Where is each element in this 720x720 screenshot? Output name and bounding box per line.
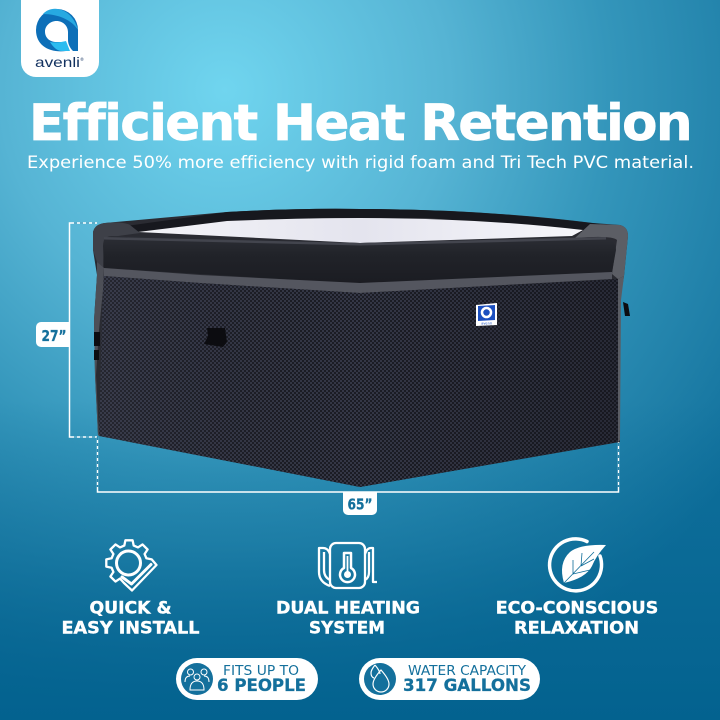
icon: water drops: [364, 663, 396, 695]
label: QUICK &: [90, 598, 172, 618]
feature: dual heating system: SYSTEM: [309, 618, 385, 638]
pill: water capacity 317 gallons: 317 GALLONS: [403, 676, 531, 696]
feature: quick and easy install: [62, 540, 200, 638]
back rim: [112, 209, 600, 232]
hot tub photo: [93, 209, 630, 487]
label: DUAL HEATING: [276, 598, 420, 618]
dimension: width 65 inches: [98, 437, 618, 515]
title: Efficient Heat Retention: [29, 94, 691, 152]
water surface: [138, 218, 583, 243]
icon: people: [181, 663, 213, 695]
feature: quick and easy install: EASY INSTALL: [62, 618, 200, 638]
valve: [204, 328, 227, 347]
icon: heater with thermometer: [319, 543, 377, 588]
tub logo tag: [476, 303, 497, 326]
left corner: [93, 222, 140, 268]
tub body silhouette: [93, 209, 628, 487]
logo wordmark: avenli: [35, 54, 80, 70]
icon: leaf in ring: [550, 539, 606, 591]
rim top edge: [104, 237, 606, 246]
pill: fits up to 6 people: 6 PEOPLE: [217, 676, 306, 696]
subtitle: Experience 50% more efficiency with rigid foam and Tri Tech PVC material.: [27, 153, 694, 172]
right strap: [623, 302, 630, 316]
feature: dual heating system: [276, 543, 420, 638]
label: ECO-CONSCIOUS: [496, 598, 658, 618]
dimension: height 27 inches: [36, 223, 98, 437]
dimension: width 65 inches: 65”: [348, 496, 372, 514]
pill text: FITS UP TO: [223, 663, 299, 679]
left side strip: [94, 262, 104, 436]
left strap: [94, 332, 100, 360]
front rim: [103, 236, 616, 284]
right corner: [575, 224, 628, 279]
dimension: height 27 inches: 27”: [42, 327, 66, 345]
mesh shading: [99, 276, 618, 487]
logo badge: [21, 0, 99, 77]
rim band: [104, 268, 612, 293]
pill: fits up to 6 people: [176, 658, 318, 700]
right side strip: [618, 276, 624, 442]
icon: gear with check: [106, 540, 156, 590]
mesh side panels: [99, 276, 618, 487]
pill: water capacity 317 gallons: [359, 658, 540, 700]
feature: eco-conscious relaxation: RELAXATION: [514, 618, 639, 638]
icon: avenli logo mark: [36, 9, 78, 51]
pill text: WATER CAPACITY: [408, 663, 527, 679]
tub logo tag: avenli: [481, 322, 492, 326]
feature: eco-conscious relaxation: [496, 539, 658, 638]
logo badge: ®: [80, 57, 84, 62]
